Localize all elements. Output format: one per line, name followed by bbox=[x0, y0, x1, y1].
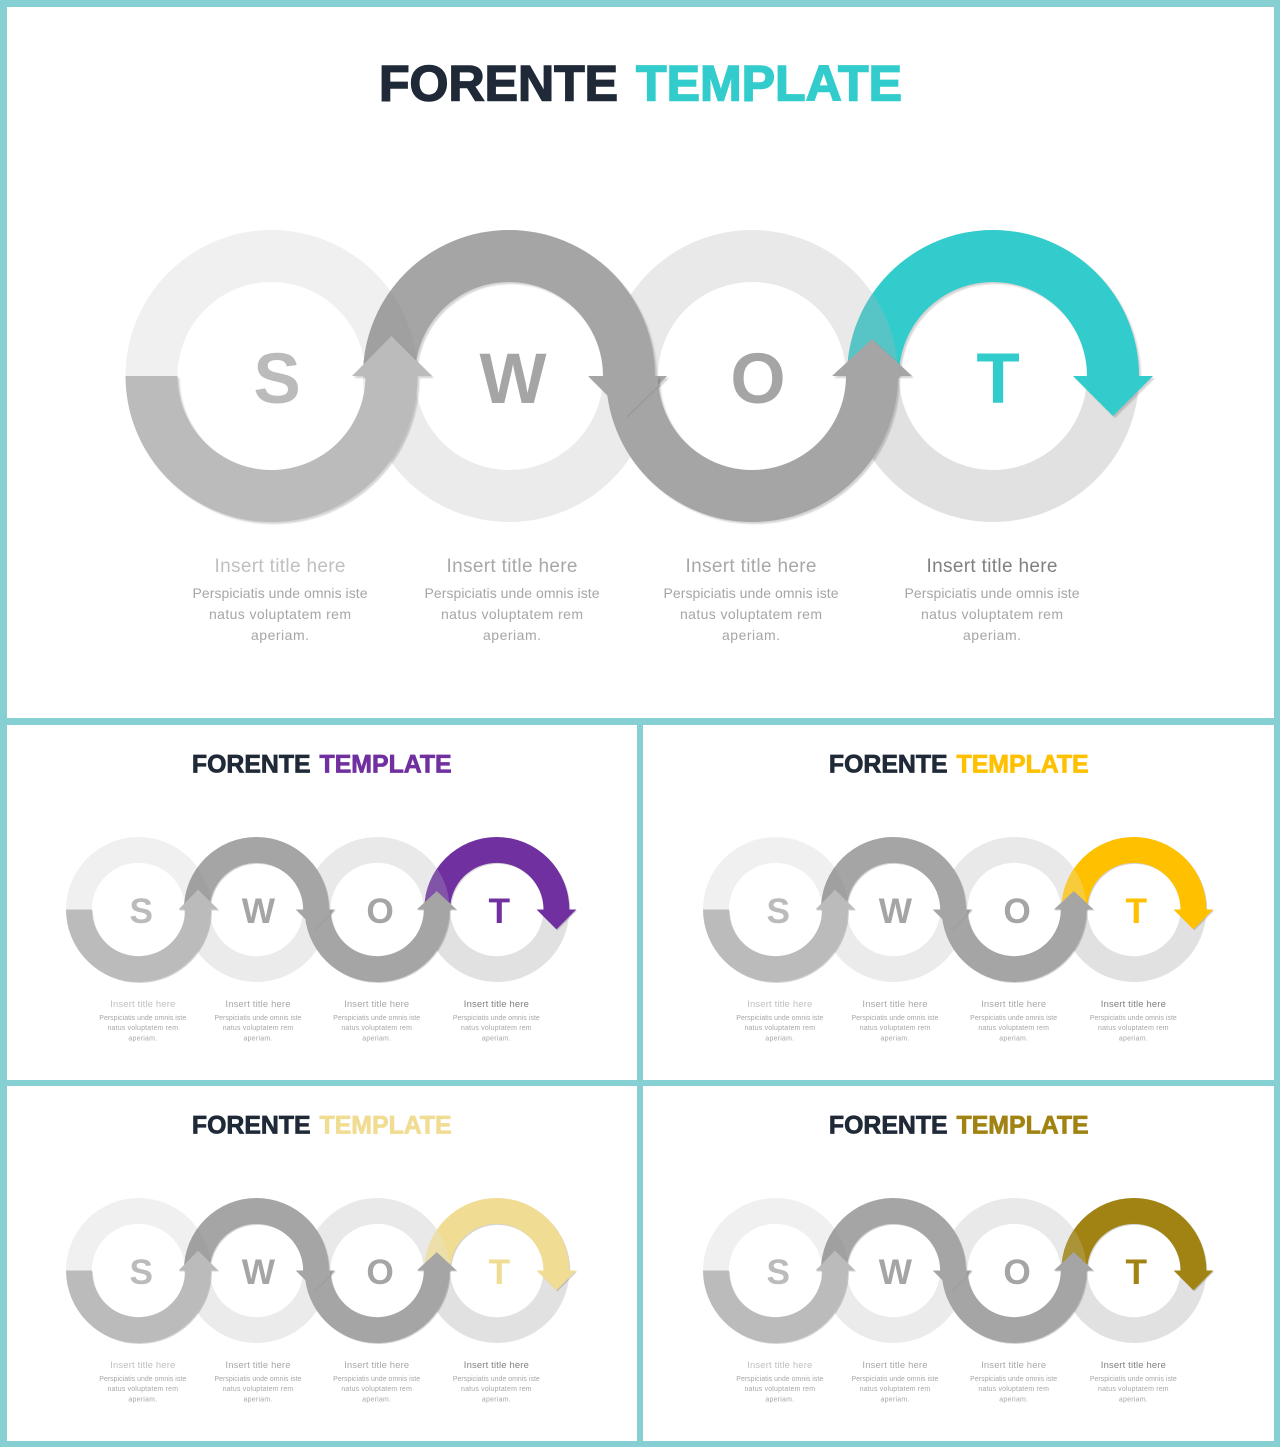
captions: Insert title here bbox=[862, 1359, 927, 1370]
captions bbox=[99, 1359, 540, 1404]
arrow: S bbox=[66, 890, 218, 982]
captions: Perspiciatis unde omnis iste bbox=[215, 1376, 302, 1383]
letters: S bbox=[253, 340, 301, 419]
captions: Insert title here bbox=[344, 998, 409, 1009]
captions: natus voluptatem rem bbox=[441, 606, 583, 622]
title: FORENTE bbox=[379, 55, 618, 111]
captions: Perspiciatis unde omnis iste bbox=[333, 1015, 420, 1022]
title: FORENTE bbox=[829, 752, 948, 779]
captions: Perspiciatis unde omnis iste bbox=[664, 585, 839, 601]
arrow: O bbox=[305, 1252, 457, 1343]
letters: W bbox=[879, 1253, 913, 1292]
captions: natus voluptatem rem bbox=[921, 606, 1063, 622]
captions: Insert title here bbox=[862, 998, 927, 1009]
captions: natus voluptatem rem bbox=[461, 1386, 532, 1393]
letters bbox=[253, 340, 1020, 419]
captions: aperiam. bbox=[765, 1036, 794, 1043]
letters: S bbox=[767, 892, 790, 931]
panel content pale gold bbox=[66, 1113, 576, 1404]
background rings bbox=[152, 256, 1113, 496]
captions: aperiam. bbox=[1119, 1397, 1148, 1404]
captions: natus voluptatem rem bbox=[860, 1025, 930, 1032]
arrow: T bbox=[847, 230, 1153, 416]
captions: Perspiciatis unde omnis iste bbox=[453, 1376, 540, 1383]
letters: T bbox=[976, 340, 1020, 419]
captions: Insert title here bbox=[446, 556, 578, 577]
captions: Insert title here bbox=[214, 556, 346, 577]
captions: Perspiciatis unde omnis iste bbox=[970, 1376, 1057, 1383]
captions: Perspiciatis unde omnis iste bbox=[333, 1376, 420, 1383]
captions: aperiam. bbox=[881, 1036, 909, 1043]
captions: aperiam. bbox=[1119, 1036, 1148, 1043]
captions: Insert title here bbox=[1101, 1359, 1166, 1370]
captions: aperiam. bbox=[999, 1397, 1028, 1404]
captions: natus voluptatem rem bbox=[223, 1386, 293, 1393]
captions: Perspiciatis unde omnis iste bbox=[736, 1376, 823, 1383]
arrow: S bbox=[703, 890, 855, 982]
captions: Insert title here bbox=[344, 1359, 409, 1370]
arrow: T bbox=[424, 1198, 576, 1290]
letters: W bbox=[242, 892, 276, 931]
captions: aperiam. bbox=[128, 1036, 157, 1043]
captions: Perspiciatis unde omnis iste bbox=[215, 1015, 302, 1022]
captions: natus voluptatem rem bbox=[341, 1386, 412, 1393]
captions bbox=[736, 998, 1177, 1043]
captions: Perspiciatis unde omnis iste bbox=[970, 1015, 1057, 1022]
letters: O bbox=[1003, 892, 1031, 931]
letters bbox=[130, 892, 511, 931]
title: FORENTE bbox=[829, 1113, 948, 1140]
captions: Insert title here bbox=[981, 998, 1046, 1009]
captions bbox=[192, 556, 1080, 643]
captions: Perspiciatis unde omnis iste bbox=[736, 1015, 823, 1022]
letters bbox=[767, 892, 1148, 931]
arrow: W bbox=[364, 230, 669, 396]
background rings bbox=[79, 850, 556, 969]
captions: natus voluptatem rem bbox=[744, 1025, 815, 1032]
captions: Insert title here bbox=[110, 998, 175, 1009]
arrow: W bbox=[821, 837, 973, 920]
captions: Perspiciatis unde omnis iste bbox=[192, 585, 368, 601]
arrow: S bbox=[126, 336, 432, 522]
title bbox=[379, 55, 902, 111]
captions: natus voluptatem rem bbox=[461, 1025, 532, 1032]
captions: aperiam. bbox=[362, 1036, 391, 1043]
title: TEMPLATE bbox=[957, 1113, 1089, 1140]
title bbox=[829, 752, 1089, 779]
captions: Perspiciatis unde omnis iste bbox=[852, 1376, 939, 1383]
letters: S bbox=[767, 1253, 790, 1292]
background rings bbox=[79, 1211, 556, 1330]
captions: natus voluptatem rem bbox=[680, 606, 822, 622]
captions: natus voluptatem rem bbox=[107, 1386, 178, 1393]
captions: Perspiciatis unde omnis iste bbox=[453, 1015, 540, 1022]
letters: W bbox=[879, 892, 913, 931]
captions: aperiam. bbox=[128, 1397, 157, 1404]
captions: Insert title here bbox=[926, 556, 1058, 577]
arrow: T bbox=[1061, 837, 1213, 929]
captions: Insert title here bbox=[747, 998, 812, 1009]
arrow: O bbox=[942, 1252, 1094, 1343]
panel: yellow template bbox=[643, 725, 1274, 1080]
arrow: T bbox=[424, 837, 576, 929]
captions: Insert title here bbox=[225, 998, 290, 1009]
captions: natus voluptatem rem bbox=[978, 1025, 1049, 1032]
arrow: O bbox=[305, 891, 457, 982]
captions bbox=[99, 998, 540, 1043]
title bbox=[192, 752, 452, 779]
captions: aperiam. bbox=[483, 627, 541, 643]
title bbox=[829, 1113, 1089, 1140]
panel content purple bbox=[66, 752, 576, 1043]
panel: main teal template bbox=[7, 7, 1274, 718]
captions: natus voluptatem rem bbox=[341, 1025, 412, 1032]
captions: Perspiciatis unde omnis iste bbox=[904, 585, 1080, 601]
captions: natus voluptatem rem bbox=[1098, 1386, 1169, 1393]
captions: Insert title here bbox=[686, 556, 816, 577]
captions: aperiam. bbox=[963, 627, 1021, 643]
captions: aperiam. bbox=[251, 627, 309, 643]
panel: purple template bbox=[7, 725, 637, 1080]
letters: O bbox=[730, 340, 786, 419]
captions: aperiam. bbox=[722, 627, 780, 643]
captions: natus voluptatem rem bbox=[1098, 1025, 1169, 1032]
letters: T bbox=[489, 892, 511, 931]
letters: T bbox=[1126, 892, 1148, 931]
arrow: W bbox=[821, 1198, 973, 1280]
arrow: T bbox=[1061, 1198, 1213, 1290]
captions: Perspiciatis unde omnis iste bbox=[1090, 1376, 1177, 1383]
captions: aperiam. bbox=[362, 1397, 391, 1404]
letters: S bbox=[130, 1253, 153, 1292]
letters: W bbox=[242, 1253, 276, 1292]
title: TEMPLATE bbox=[320, 752, 452, 779]
captions: aperiam. bbox=[482, 1397, 511, 1404]
letters bbox=[767, 1253, 1148, 1292]
captions: Perspiciatis unde omnis iste bbox=[1090, 1015, 1177, 1022]
panel: dark gold template bbox=[643, 1086, 1274, 1441]
arrow: W bbox=[184, 1198, 336, 1280]
captions: natus voluptatem rem bbox=[223, 1025, 293, 1032]
captions: Insert title here bbox=[981, 1359, 1046, 1370]
captions: aperiam. bbox=[765, 1397, 794, 1404]
captions: Insert title here bbox=[747, 1359, 812, 1370]
captions: aperiam. bbox=[244, 1397, 272, 1404]
letters: O bbox=[366, 892, 394, 931]
captions: aperiam. bbox=[881, 1397, 909, 1404]
letters: T bbox=[1126, 1253, 1148, 1292]
captions: aperiam. bbox=[999, 1036, 1028, 1043]
letters bbox=[130, 1253, 511, 1292]
title: FORENTE bbox=[192, 1113, 311, 1140]
captions: natus voluptatem rem bbox=[860, 1386, 930, 1393]
captions: aperiam. bbox=[482, 1036, 511, 1043]
captions: Insert title here bbox=[464, 998, 529, 1009]
captions: Insert title here bbox=[1101, 998, 1166, 1009]
captions: natus voluptatem rem bbox=[978, 1386, 1049, 1393]
title: TEMPLATE bbox=[957, 752, 1089, 779]
captions: Perspiciatis unde omnis iste bbox=[424, 585, 600, 601]
letters: O bbox=[366, 1253, 394, 1292]
captions: natus voluptatem rem bbox=[107, 1025, 178, 1032]
arrow: S bbox=[703, 1251, 855, 1343]
panel: pale gold template bbox=[7, 1086, 637, 1441]
arrow: W bbox=[184, 837, 336, 920]
letters: T bbox=[489, 1253, 511, 1292]
captions bbox=[736, 1359, 1177, 1404]
panel content yellow bbox=[703, 752, 1213, 1043]
title: TEMPLATE bbox=[636, 55, 902, 111]
letters: W bbox=[479, 340, 547, 419]
panel content dark gold bbox=[703, 1113, 1213, 1404]
arrow: O bbox=[606, 339, 912, 522]
captions: Perspiciatis unde omnis iste bbox=[852, 1015, 939, 1022]
letters: O bbox=[1003, 1253, 1031, 1292]
title: TEMPLATE bbox=[320, 1113, 452, 1140]
arrow: O bbox=[942, 891, 1094, 982]
captions: Perspiciatis unde omnis iste bbox=[99, 1376, 186, 1383]
captions: Perspiciatis unde omnis iste bbox=[99, 1015, 186, 1022]
captions: Insert title here bbox=[110, 1359, 175, 1370]
captions: Insert title here bbox=[464, 1359, 529, 1370]
background rings bbox=[716, 850, 1193, 969]
background rings bbox=[716, 1211, 1193, 1330]
title: FORENTE bbox=[192, 752, 311, 779]
letters: S bbox=[130, 892, 153, 931]
captions: aperiam. bbox=[244, 1036, 272, 1043]
captions: Insert title here bbox=[225, 1359, 290, 1370]
arrow: S bbox=[66, 1251, 218, 1343]
captions: natus voluptatem rem bbox=[209, 606, 351, 622]
captions: natus voluptatem rem bbox=[744, 1386, 815, 1393]
title bbox=[192, 1113, 452, 1140]
